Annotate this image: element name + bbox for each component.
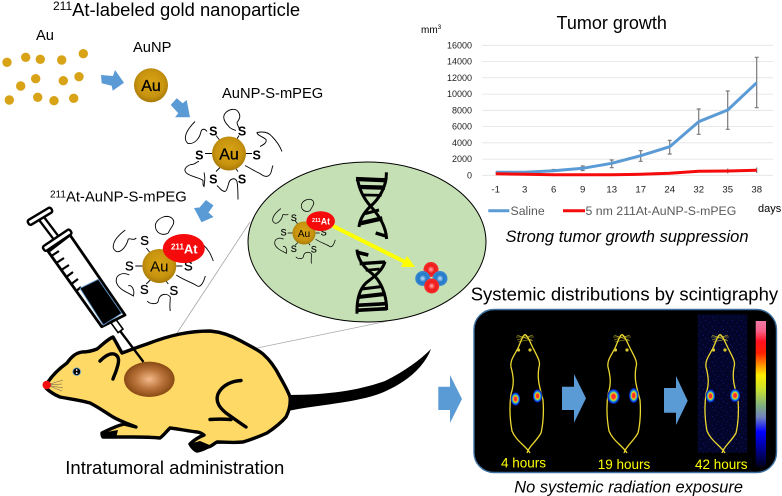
radiation arrow [333,226,415,267]
plunger rod [40,216,57,239]
nose [42,381,51,389]
panel: cell oval [248,162,486,322]
arrow: atoms to AuNP [101,70,124,91]
211At-AuNP-S-mPEG particle: Au [150,258,168,276]
whiskers [47,380,63,391]
DNA helix [356,172,387,314]
ear [100,354,119,379]
tumor [124,362,175,397]
x axis labels: 24 [664,184,676,196]
x axis labels: -1 [491,184,500,196]
particle in cell [273,199,335,264]
x axis labels: 6 [551,184,556,196]
AuNP-S-mPEG particle: Au [219,146,239,164]
legend: Saline [510,204,545,218]
needle [119,330,144,362]
AuNP-S-mPEG particle: S [238,172,246,186]
AuNP-S-mPEG particle [185,109,282,200]
211At-AuNP-S-mPEG particle: S [140,233,149,248]
arrow: to 211At-AuNP-S-mPEG [194,200,214,222]
flange [42,229,72,252]
plunger handle [27,207,53,226]
x axis labels: 32 [693,184,704,196]
time labels: 42 hours [695,457,748,472]
211At-AuNP-S-mPEG particle: 211 [171,242,184,252]
particle in cell: At [321,216,330,226]
particle in cell: S [291,213,297,223]
label: 211At-AuNP-S-mPEG: 211 [50,190,66,200]
panel arrow 1 [562,374,586,423]
y axis labels: 12000 [447,73,472,83]
particle in cell: S [321,228,327,238]
particle in cell: S [291,244,297,254]
x axis labels: 13 [606,184,617,196]
AuNP particle: Au [141,78,161,95]
x axis labels: 3 [522,184,527,196]
label: intratumoral administration: Intratumoral administration [65,457,284,478]
211At-AuNP-S-mPEG particle [113,216,213,311]
label: Au: Au [36,28,54,44]
panel arrow 2 [664,376,688,425]
x axis labels: 9 [580,184,585,196]
noisy background of third image [698,314,747,453]
time labels: 19 hours [598,457,650,472]
label: AuNP: AuNP [133,40,172,56]
211At-AuNP-S-mPEG particle: At [184,242,198,256]
mouse [42,331,431,451]
rat at 19 hours [607,334,640,453]
hub [111,319,123,333]
saline line [496,83,757,172]
particle in cell: S [281,228,287,238]
tail [288,349,431,411]
graduations [51,251,81,291]
rat at 42 hours [705,334,740,453]
211At-AuNP-S-mPEG particle: S [140,282,149,297]
panel: scintigraphy images [474,310,776,472]
time labels [501,456,748,472]
AuNP particle [134,68,168,102]
gold atoms [2,49,88,105]
heading: scintigraphy: Systemic distributions by scintigraphy [471,284,779,304]
particle in cell: 211 [312,218,321,224]
eye [73,368,80,376]
radiation particles [415,262,448,294]
legend: 5 nm 211At-AuNP-S-mPEG [586,204,736,218]
rat at 4 hours [510,334,543,453]
barrel [48,235,125,327]
x axis labels: 35 [722,184,733,196]
y axis labels: 0 [467,170,472,180]
connector lines from tumor to oval [156,222,388,367]
label: 211At-AuNP-S-mPEG: At-AuNP-S-mPEG [66,190,187,206]
treatment line [496,170,757,175]
211At-AuNP-S-mPEG particle: S [169,283,178,298]
error bars [552,57,759,173]
x unit: days [758,203,782,215]
arrow: AuNP to AuNP-S-mPEG [171,98,190,117]
legend [488,204,736,218]
time labels: 4 hours [501,456,546,470]
label: AuNP-S-mPEG: AuNP-S-mPEG [222,86,323,102]
haunch [210,380,246,427]
y axis labels: 14000 [447,57,472,67]
y unit: 3 [438,24,442,31]
AuNP-S-mPEG particle: S [238,124,246,138]
color scale [756,321,766,467]
AuNP-S-mPEG particle: S [195,148,203,162]
body [46,331,290,451]
y axis labels: 16000 [447,40,472,50]
211At-AuNP-S-mPEG particle: S [125,258,134,274]
feet [101,430,212,451]
y axis labels: 2000 [452,154,472,164]
x axis labels: 38 [751,184,762,196]
y axis labels: 10000 [447,89,472,99]
AuNP-S-mPEG particle: S [253,148,261,162]
fluid [80,279,122,325]
AuNP-S-mPEG particle: S [209,124,217,138]
y axis labels [447,40,472,180]
y unit: mm [421,25,438,36]
chart title: Tumor growth [557,13,667,33]
x axis labels [491,184,762,196]
y axis labels: 8000 [452,106,472,116]
particle in cell: S [311,245,317,255]
chart: tumor growth [421,13,782,246]
211At-AuNP-S-mPEG particle: S [184,258,193,274]
y axis labels: 6000 [452,122,472,132]
syringe [27,207,144,362]
y axis labels: 4000 [452,138,472,148]
scintigraphy caption: No systemic radiation exposure [514,478,743,496]
x axis labels: 17 [635,184,646,196]
particle in cell: Au [298,229,310,240]
arrow: mouse to scintigraphy [438,375,462,423]
AuNP-S-mPEG particle: S [209,172,217,186]
chart caption: Strong tumor growth suppression [506,228,749,246]
